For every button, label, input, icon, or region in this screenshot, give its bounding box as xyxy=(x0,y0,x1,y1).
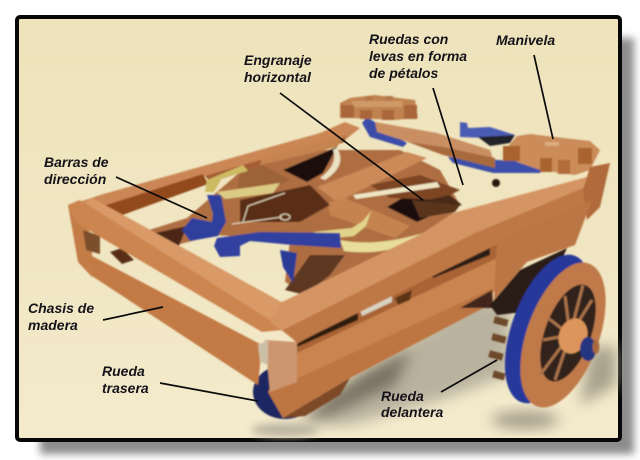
label: Rueda delantera: delantera xyxy=(381,404,443,420)
label: Barras de direccion: dirección xyxy=(44,171,106,187)
horizontal gear xyxy=(412,179,500,218)
chassis: left end post xyxy=(68,200,134,277)
front wheel xyxy=(487,243,623,419)
gears behind front wheel xyxy=(460,248,567,380)
central plank connecting gears xyxy=(375,122,495,168)
left gear wheel xyxy=(340,95,418,120)
label: Ruedas con levas en forma de petalos: levas en forma xyxy=(369,48,467,64)
right gear wheel (crank) xyxy=(503,134,600,175)
rear wheel xyxy=(253,365,317,419)
leader lines xyxy=(103,55,553,401)
chassis: front right top beam xyxy=(270,165,605,343)
blue crank bars xyxy=(362,117,547,173)
label: Engranaje horizontal: Engranaje xyxy=(244,52,312,68)
label: Rueda trasera: trasera xyxy=(102,380,149,396)
label: Barras de direccion: Barras de xyxy=(44,154,109,170)
label: Engranaje horizontal: horizontal xyxy=(244,69,312,85)
steering linkage wires xyxy=(232,193,290,224)
machine illustration xyxy=(68,95,623,419)
label: Chasis de madera: Chasis de xyxy=(28,300,94,316)
chassis: front corner post xyxy=(258,340,297,392)
label: Chasis de madera: madera xyxy=(28,317,78,333)
central wooden mechanism base xyxy=(143,135,462,295)
chassis: right end post xyxy=(494,163,610,300)
blue steering bars and yellow leaf springs xyxy=(182,148,440,283)
side window dark slots xyxy=(297,240,497,353)
label: Rueda trasera: Rueda xyxy=(102,363,145,379)
label: Rueda delantera: Rueda xyxy=(381,388,424,404)
back beam xyxy=(72,122,360,217)
floor shadows xyxy=(251,300,616,437)
label: Ruedas con levas en forma de petalos: de pétalos xyxy=(369,65,438,81)
chassis: lower right rail xyxy=(268,255,497,418)
chassis: front left top beam xyxy=(68,198,283,332)
label: Manivela: Manivela xyxy=(496,32,555,48)
chassis: lower left rail xyxy=(92,256,262,385)
label: Ruedas con levas en forma de petalos: Ruedas con xyxy=(369,31,448,47)
